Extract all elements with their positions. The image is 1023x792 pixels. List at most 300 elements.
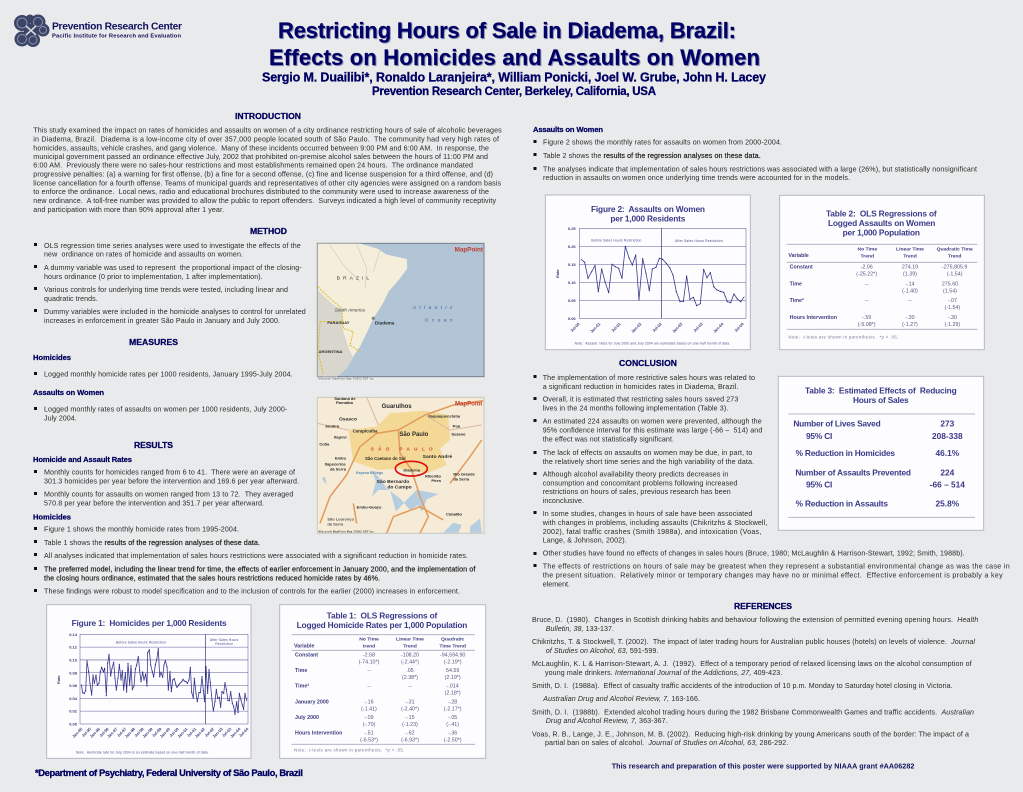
map labels: São Paulo bbox=[399, 432, 429, 438]
subheading: homicides results: Homicides bbox=[33, 512, 71, 522]
list: method bullets: OLS regression time series analyses were used to investigate the effects of the bbox=[44, 242, 301, 250]
table body: Quadratic Time bbox=[937, 246, 973, 252]
heading: measures: MEASURES bbox=[129, 337, 178, 347]
table body: -- bbox=[408, 684, 412, 690]
text block: references: McLaughlin, K. L & Harrison-Stewart, A. J. (1992). Effect of a temporary period of relaxed licensing laws on the alcohol consumption of bbox=[532, 660, 972, 668]
map labels: da Serra bbox=[327, 521, 344, 526]
panel: figure 2 chart: per 1,000 Residents bbox=[610, 214, 686, 224]
map labels: SÃO PAULO bbox=[371, 446, 437, 452]
table body: -- bbox=[865, 298, 869, 304]
line chart: assault rate: 0.00 bbox=[568, 316, 576, 321]
table body: -.51 bbox=[364, 731, 374, 737]
panel: table 2 bbox=[780, 195, 984, 350]
list: conclusion: 2002), fatal traffic crashes (Smith 1988a), and intoxication (Voas, bbox=[543, 528, 761, 536]
list: conclusion: element. bbox=[543, 581, 570, 589]
map labels: Osasco bbox=[339, 416, 357, 422]
list: assault results: The analyses indicate that implementation of sales hours restrictions was associated with a large (26%), but statistically nonsignificant bbox=[543, 165, 977, 173]
table body: (-1.54) bbox=[947, 271, 963, 277]
table body: (-1.54) bbox=[944, 305, 960, 311]
text block: introduction: This study examined the impact on rates of homicides and assaults on women of a city ordinance restricting hours of sale of alcoholic beverages bbox=[33, 127, 502, 135]
table body: Constant bbox=[790, 264, 813, 270]
chart title: Figure 2: Assaults on Women bbox=[591, 204, 705, 214]
line chart: homicide rate: Jan-98 bbox=[124, 726, 137, 739]
table body: -.59 bbox=[862, 315, 871, 321]
table body: -2.06 bbox=[861, 264, 873, 270]
table body: (-2.50*) bbox=[444, 738, 462, 744]
table body: 25.8% bbox=[936, 499, 960, 509]
line chart: assault rate: Jul-03 bbox=[692, 321, 704, 333]
line chart: homicide rate: Jul-02 bbox=[203, 726, 216, 738]
line chart: homicide rate: Jan-02 bbox=[194, 726, 207, 739]
list: assault results: Figure 2 shows the monthly rates for assaults on women from 2000-2004. bbox=[543, 139, 782, 147]
map labels: South America bbox=[335, 308, 365, 313]
authors: Sergio M. Duailibi*, Ronaldo Laranjeira*, William Ponicki, Joel W. Grube, John H. Lacey bbox=[262, 70, 766, 84]
list: assault results: Table 2 shows the results of the regression analyses on these data. bbox=[543, 152, 761, 160]
table body: Hours Intervention bbox=[790, 315, 837, 321]
table body: 224 bbox=[940, 468, 955, 478]
text block: references: of Studies on Alcohol, 63, 591-599. bbox=[546, 647, 658, 655]
map labels: Rio Grande bbox=[453, 472, 476, 477]
table body: -.31 bbox=[405, 699, 415, 705]
line chart: homicide rate: Jan-03 bbox=[211, 726, 224, 739]
list: conclusion: An estimated 224 assaults on women were prevented, although the bbox=[543, 418, 762, 426]
list: assault measure bbox=[34, 406, 288, 423]
line chart: assault rate bbox=[555, 226, 746, 334]
table body: -.15 bbox=[405, 715, 415, 721]
text block: introduction: to enforce the ordinance. Local news, radio and educational brochures distributed to the community were used to increase awareness of the bbox=[33, 188, 489, 196]
text block: references: Bruce, D. (1980). Changes in Scottish drinking habits and behaviour following the extension of permitted evening opening hours. Health bbox=[532, 616, 978, 624]
list: conclusion: The implementation of more restrictive sales hours was related to bbox=[543, 374, 755, 382]
table body bbox=[294, 637, 466, 744]
list: conclusion: Overall, it is estimated that restricting sales hours saved 273 bbox=[543, 396, 738, 404]
list: homicide measure: Logged monthly homicide rates per 1000 residents, January 1995-July 2004. bbox=[44, 371, 293, 379]
map labels: Suzano bbox=[451, 431, 466, 436]
list: conclusion: a significant reduction in homicides rates in Diadema, Brazil. bbox=[543, 383, 738, 391]
panel: table 1: Logged Homicide Rates per 1,000 Population bbox=[297, 620, 467, 630]
list: method bullets: new ordinance on rates of homicide and assaults on women. bbox=[44, 251, 243, 259]
panel: figure 1 chart bbox=[47, 605, 251, 758]
table body: (-1.29) bbox=[944, 322, 960, 328]
line chart: homicide rate: Jul-01 bbox=[186, 726, 198, 738]
list: conclusion: consumption and concomitant problems following increased bbox=[543, 479, 737, 487]
table body: (-2.44*) bbox=[401, 659, 419, 665]
table body: -275,805.9 bbox=[942, 264, 967, 270]
table body: (-5.08*) bbox=[858, 322, 876, 328]
table body: (-2.40*) bbox=[401, 706, 419, 712]
table body: -.14 bbox=[905, 281, 915, 287]
table body: .05 bbox=[406, 668, 414, 674]
title: Effects on Homicides and Assaults on Women bbox=[269, 45, 760, 70]
text block: references: Voas, R. B., Lange, J. E., Johnson, M. B. (2002). Reducing high-risk drinking by young Americans south of the border: The impact of a bbox=[532, 730, 969, 738]
list: conclusion: Other studies have found no effects of changes in sales hours (Bruce, 1980; McLaughlin & Harrison-Stewart, 1992; Smith, 1988b). bbox=[543, 550, 965, 558]
list: rates: Monthly counts for assaults on women ranged from 13 to 72. They averaged bbox=[44, 491, 293, 499]
text block: introduction: 6:00 AM. Previously there were no sales-hour restrictions and most establishments remained open 24 hours. The ordinance mandated bbox=[33, 162, 473, 170]
text block: introduction: in Diadema, Brazil. Diadema is a low-income city of over 357,000 people located south of São Paulo. The community had very high rates of bbox=[33, 135, 499, 143]
panel: figure 2 chart bbox=[545, 195, 750, 350]
line chart: assault rate: Jan-03 bbox=[671, 321, 684, 334]
table body: (-.41) bbox=[446, 722, 459, 728]
table body: (-74.10*) bbox=[359, 659, 380, 665]
table body: -108.20 bbox=[401, 652, 419, 658]
table body: (-2.17*) bbox=[444, 706, 462, 712]
list: method bullets: quadratic trends. bbox=[44, 295, 98, 303]
table body: -66 – 514 bbox=[930, 479, 965, 489]
map labels: BRAZIL bbox=[337, 275, 372, 281]
table body: July 2000 bbox=[295, 715, 319, 721]
map labels: do Campo bbox=[387, 485, 412, 491]
line chart: homicide rate: Jan-99 bbox=[141, 726, 154, 739]
table body: -.07 bbox=[948, 298, 957, 304]
list: rates: Monthly counts for homicides ranged from 6 to 41. There were an average of bbox=[44, 469, 295, 477]
list: conclusion bbox=[534, 374, 1010, 589]
map labels: São Lourenço bbox=[327, 517, 354, 522]
list: conclusion: the effect was not statistically significant. bbox=[543, 435, 674, 443]
line chart: homicide rate: Before Sales Hours Restriction bbox=[116, 640, 166, 644]
text block: references: Smith, D. I. (1988a). Effect of casualty traffic accidents of the introduction of 10 p.m. Monday to Saturday hotel closing in Victoria. bbox=[532, 682, 953, 690]
table body: % Reduction in Homicides bbox=[796, 448, 895, 458]
map labels: Embu-Guaçu bbox=[357, 505, 382, 510]
title: Restricting Hours of Sale in Diadema, Brazil: bbox=[278, 18, 736, 43]
line chart: homicide rate: 0.10 bbox=[69, 658, 78, 663]
table body: Hours Intervention bbox=[295, 731, 342, 737]
line chart: homicide rate: 0.04 bbox=[69, 696, 78, 701]
map labels: Itapevi bbox=[334, 435, 347, 440]
line chart: assault rate: 0.05 bbox=[568, 298, 576, 303]
table body: Quadratic bbox=[441, 637, 465, 643]
list: homicide results: All analyses indicated that implementation of sales hours restrictions were associated with a significant reduction in homicide rates. bbox=[44, 552, 468, 560]
chart note: Note: Assault rates for July 2000 and July 2004 are estimates based on one-half month of data. bbox=[575, 342, 730, 346]
map labels: da Serra bbox=[453, 477, 470, 482]
map labels: PARAGUAY bbox=[327, 320, 350, 325]
table body: January 2000 bbox=[295, 699, 329, 705]
list: assault results bbox=[534, 139, 977, 182]
table body: 95% CI bbox=[806, 431, 832, 441]
table body: (-1.27) bbox=[902, 322, 918, 328]
table body: -- bbox=[367, 684, 371, 690]
list: conclusion: Although alcohol availability theory predicts decreases in bbox=[543, 470, 728, 478]
list: conclusion: restrictions on hours of sales, previous research has been bbox=[543, 488, 731, 496]
text block: introduction bbox=[33, 127, 502, 214]
text block: introduction: and participation with more than 90% approval after 1 year. bbox=[33, 206, 224, 214]
table body: (-2.19*) bbox=[444, 659, 462, 665]
list: method bullets bbox=[34, 242, 306, 325]
line chart: homicide rate: Jul-00 bbox=[168, 726, 180, 738]
map labels: Microsoft MapPoint Map ©2002 GDT Inc bbox=[319, 530, 374, 533]
table body: (2.38*) bbox=[402, 675, 418, 681]
table body: -.30 bbox=[905, 315, 915, 321]
list: conclusion: with changes in problems, including assaults (Chikritzhs & Stockwell, bbox=[542, 519, 767, 527]
list: conclusion: lives in the 24 months following implementation (Table 3). bbox=[543, 405, 728, 413]
table body: Trend bbox=[861, 253, 874, 259]
map labels: Santana de bbox=[334, 396, 356, 401]
map labels: Ribeirão bbox=[425, 473, 442, 478]
line chart: homicide rate: Jan-04 bbox=[229, 726, 242, 739]
table body: Linear Time bbox=[896, 246, 924, 252]
panel: table 2: Logged Assaults on Women bbox=[828, 218, 935, 228]
table body bbox=[793, 419, 965, 509]
text block: references: Smith, D. I. (1988b). Extended alcohol trading hours during the 1982 Brisbane Commonwealth Games and traffic accidents. Australian bbox=[532, 708, 974, 716]
text block: references: Bulletin, 38, 133-137. bbox=[546, 625, 614, 633]
line chart: homicide rate: After Sales Hours bbox=[210, 638, 239, 642]
map labels: Embu bbox=[335, 455, 347, 460]
line chart: homicide rate: Jan-97 bbox=[106, 726, 119, 739]
line chart: assault rate: Rate bbox=[555, 269, 560, 278]
list: method bullets: increases in enforcement in greater São Paulo in January and July 2000. bbox=[44, 317, 280, 325]
line chart: assault rate: 0.15 bbox=[568, 262, 576, 267]
text block: references: partial ban on sales of alcohol. Journal of Studies on Alcohol, 63, 286-292. bbox=[545, 739, 788, 747]
list: assault results: reduction in assaults on women once underlying time trends were accounted for in the models. bbox=[543, 174, 850, 182]
chart note: Note: Homicide rate for July 2004 is an estimate based on one-half month of data. bbox=[76, 750, 209, 754]
map labels: Jandira bbox=[325, 424, 340, 429]
line chart: assault rate: After Sales Hours Restriction bbox=[675, 239, 723, 243]
map labels: São Caetano do Sul bbox=[365, 456, 406, 461]
map labels: MapPoint bbox=[455, 401, 482, 407]
map labels: da Serra bbox=[330, 466, 347, 471]
organisation name: Prevention Research Center bbox=[52, 22, 182, 32]
table body: -2.58 bbox=[363, 652, 375, 658]
table note: Note: t-tests are shown in parenthesis. *p < .05. bbox=[788, 334, 898, 339]
line chart: homicide rate: 0.14 bbox=[69, 632, 78, 637]
table title: Table 1: OLS Regressions of bbox=[327, 611, 438, 621]
subheading: homicide and assault rates: Homicide and Assault Rates bbox=[33, 455, 132, 464]
line chart: homicide rate: Jul-95 bbox=[80, 726, 93, 738]
table body: (2.19*) bbox=[445, 675, 461, 681]
table body: 274.19 bbox=[902, 264, 918, 270]
list: method bullets: Various controls for underlying time trends were tested, including linear and bbox=[44, 286, 288, 294]
table body: -.05 bbox=[448, 715, 457, 721]
line chart: assault rate: Before Sales Hours Restriction bbox=[591, 239, 641, 243]
table body: -.16 bbox=[364, 699, 374, 705]
line chart: homicide rate: Jul-97 bbox=[116, 726, 128, 738]
map labels: Cubatão bbox=[446, 511, 463, 516]
table body: Trend bbox=[948, 253, 961, 259]
table body: trend bbox=[363, 644, 375, 650]
list: rates bbox=[34, 469, 299, 508]
line chart: homicide rate: 0.08 bbox=[69, 670, 78, 675]
list: conclusion: The effects of restrictions on hours of sale may be greatest when they represent a substantial environmental change as was the case in bbox=[543, 562, 1010, 570]
list: conclusion: Lange, & Johnson, 2002). bbox=[543, 537, 627, 545]
list: method bullets: Dummy variables were included in the homicide analyses to control for unrelated bbox=[44, 308, 306, 316]
table note: Note: t-tests are shown in parenthesis. *p < .05. bbox=[294, 748, 404, 753]
list: homicide results: the closing hours ordinance, estimated that the sales hours restrictions reduced homicide rates by 46%. bbox=[44, 574, 380, 582]
text block: introduction: progressive penalties: (a) a warning for first offense, (b) a fine for a second offense, (c) fine and license suspension for a third offense, and (d) bbox=[33, 170, 493, 178]
line chart: assault rate: Jul-00 bbox=[569, 321, 581, 333]
map labels: Carapicuiba bbox=[353, 428, 378, 433]
text block: introduction: homicides, assaults, vehicle crashes, and gang violence. Many of these incidents occurred between 9:00 PM and 6:00 AM. In response, the bbox=[33, 144, 489, 152]
line chart: homicide rate: Jul-04 bbox=[238, 726, 250, 738]
table body: Time² bbox=[295, 684, 309, 690]
table body: Trend bbox=[903, 253, 917, 259]
table body: (-6.93*) bbox=[401, 738, 419, 744]
map labels: Santo André bbox=[423, 454, 452, 460]
list: homicide results: The preferred model, including the linear trend for time, the effects of earlier enforcement in January 2000, and the implementation of bbox=[44, 565, 475, 573]
table body: -.09 bbox=[364, 715, 374, 721]
table body: -.28 bbox=[448, 699, 457, 705]
table body: 54.59 bbox=[446, 668, 459, 674]
line chart: homicide rate: Jul-03 bbox=[221, 726, 233, 738]
list: homicide results: Table 1 shows the results of the regression analyses of these data. bbox=[44, 539, 260, 547]
table body: Linear Time bbox=[396, 637, 424, 643]
line chart: assault rate: Jan-02 bbox=[630, 321, 643, 334]
table body: Constant bbox=[295, 652, 318, 658]
list: rates: 570.8 per year before the intervention and 351.7 per year afterward. bbox=[44, 500, 264, 508]
table body: 275.60 bbox=[942, 281, 958, 287]
table body: 208-338 bbox=[932, 431, 963, 441]
text block: references: Australian Drug and Alcohol Review, 7, 163-166. bbox=[542, 695, 700, 703]
funding note: This research and preparation of this poster were supported by NIAAA grant #AA06282 bbox=[612, 761, 914, 770]
list: conclusion: The lack of effects on assaults on women may be due, in part, to bbox=[543, 449, 752, 457]
line chart: homicide rate: 0.02 bbox=[69, 709, 78, 714]
line chart: homicide rate: Jan-95 bbox=[71, 726, 84, 739]
table body: 95% CI bbox=[806, 479, 832, 489]
list: rates: 301.3 homicides per year before the intervention and 169.6 per year afterward. bbox=[44, 477, 299, 485]
line chart: homicide rate: Restriction bbox=[215, 642, 233, 646]
map labels: Guarulhos bbox=[382, 404, 412, 410]
map labels: Ocean bbox=[425, 318, 456, 324]
table body bbox=[788, 246, 973, 328]
map: Brazil bbox=[317, 243, 484, 380]
line chart: homicide rate: Jul-96 bbox=[98, 726, 110, 738]
table body: (1.54) bbox=[943, 288, 957, 294]
chart title: Figure 1: Homicides per 1,000 Residents bbox=[72, 618, 227, 628]
map labels: ARGENTINA bbox=[319, 349, 342, 354]
table body: (-25.22*) bbox=[856, 271, 877, 277]
map labels: Microsoft MapPoint Map ©2002 GDT Inc bbox=[319, 377, 374, 380]
list: homicide results: These findings were robust to model specification and to the inclusion of controls for the earlier (2000) increases in enforcement. bbox=[44, 587, 460, 595]
title bbox=[262, 18, 766, 98]
map labels: Poá bbox=[453, 424, 461, 429]
line chart: assault rate: Jan-04 bbox=[712, 321, 725, 334]
table body: (1.39) bbox=[903, 271, 917, 277]
subheading: assaults on women: Assaults on Women bbox=[33, 388, 104, 397]
footnote: department: *Department of Psychiatry, Federal University of São Paulo, Brazil bbox=[35, 767, 303, 778]
map labels: Itaquaquecetuba bbox=[428, 413, 461, 418]
line chart: homicide rate bbox=[56, 632, 250, 739]
heading: introduction: INTRODUCTION bbox=[235, 111, 301, 121]
table body: 46.1% bbox=[936, 448, 960, 458]
text block: introduction: new ordinance. A toll-free number was provided to allow the public to report offenders. Surveys indicated a high level of community receptivity bbox=[33, 197, 496, 205]
table body: Time² bbox=[790, 298, 804, 304]
line chart: homicide rate: Jan-96 bbox=[89, 726, 102, 739]
text block: introduction: municipal government passed an ordinance effective July, 2002 that prohibited on-premise alcohol sales between the hours of 11:00 PM and bbox=[33, 153, 488, 161]
logo: Prevention Research Center bbox=[14, 14, 182, 47]
icon: knot bbox=[14, 14, 50, 47]
map labels: Itapecerica bbox=[325, 461, 346, 466]
line chart: homicide rate: 0.12 bbox=[69, 645, 78, 650]
list: conclusion: 95% confidence interval for this estimate was large (-66 – 514) and bbox=[543, 427, 762, 435]
highlight: Diadema bbox=[395, 461, 427, 476]
line chart: assault rate: Jul-02 bbox=[651, 321, 663, 333]
heading: conclusion: CONCLUSION bbox=[619, 358, 677, 368]
line chart: homicide rate: 0.00 bbox=[69, 722, 78, 727]
subheading: assaults on women right column: Assaults on Women bbox=[533, 125, 603, 134]
line chart: assault rate: Jan-01 bbox=[589, 321, 602, 334]
table body: -- bbox=[908, 298, 912, 304]
line chart: homicide rate: 0.06 bbox=[69, 683, 78, 688]
line chart: assault rate: 0.20 bbox=[568, 244, 576, 249]
list: conclusion: inconclusive. bbox=[543, 497, 584, 505]
list: method bullets: A dummy variable was used to represent the proportional impact of the closing- bbox=[44, 264, 302, 272]
table body: (-1.23) bbox=[402, 722, 418, 728]
table body: No Time bbox=[858, 246, 877, 252]
map labels: MapPoint bbox=[455, 247, 484, 254]
table body: (-6.53*) bbox=[360, 738, 378, 744]
line chart: assault rate: 0.25 bbox=[568, 226, 576, 231]
list: conclusion: the present situation. Relatively minor or temporary changes may have no or minimal effect. Effective enforcement is probably a key bbox=[543, 571, 1003, 579]
table body: -.014 bbox=[447, 684, 459, 690]
map labels bbox=[319, 247, 484, 380]
heading: references: REFERENCES bbox=[734, 601, 792, 611]
panel: table 3 bbox=[778, 376, 984, 530]
list: conclusion: In some studies, changes in hours of sale have been associated bbox=[543, 510, 752, 518]
line chart: homicide rate: Jan-01 bbox=[176, 726, 189, 739]
map labels: Pires bbox=[431, 478, 442, 483]
table body: -- bbox=[865, 281, 869, 287]
table body: Time bbox=[790, 281, 802, 287]
affiliation: Prevention Research Center, Berkeley, California, USA bbox=[372, 86, 656, 98]
map labels bbox=[319, 396, 482, 533]
subheading: homicides: Homicides bbox=[33, 353, 71, 362]
table body: -.36 bbox=[448, 731, 457, 737]
map: São Paulo region bbox=[317, 396, 484, 533]
table body: -94,594.90 bbox=[440, 652, 465, 658]
line chart: homicide rate: Jul-99 bbox=[151, 726, 163, 738]
table body: Variable bbox=[788, 253, 809, 259]
table body: Number of Assaults Prevented bbox=[795, 468, 911, 478]
heading: method: METHOD bbox=[250, 226, 287, 236]
map labels: São Bernardo bbox=[377, 479, 409, 485]
map labels: Parnaiba bbox=[336, 400, 354, 405]
line chart: homicide rate: Rate bbox=[56, 675, 61, 684]
table body: Trend bbox=[403, 644, 417, 650]
text block: introduction: license cancellation for a fourth offense. Teams of municipal guards and representatives of other city agencies were assigned on a random basis bbox=[33, 179, 501, 187]
table body: 273 bbox=[940, 419, 955, 429]
list: conclusion: the relatively short time series and the high variability of the data. bbox=[543, 458, 754, 466]
table body: (-1.40) bbox=[902, 288, 918, 294]
panel: table 2: per 1,000 Population bbox=[843, 227, 920, 237]
table body: (2.18*) bbox=[445, 691, 461, 697]
panel: table 3: Hours of Sales bbox=[853, 395, 909, 405]
line chart: assault rate: Jul-04 bbox=[733, 321, 745, 333]
list: assault measure: July 2004. bbox=[44, 415, 77, 423]
table title: Table 2: OLS Regressions of bbox=[826, 208, 937, 218]
table body: (-1.41) bbox=[361, 706, 377, 712]
line chart: homicide rate: Jul-98 bbox=[133, 726, 145, 738]
table body: -.30 bbox=[948, 315, 957, 321]
table body: -.62 bbox=[405, 731, 415, 737]
map labels: Cotia bbox=[319, 441, 330, 446]
table body: Time Trend bbox=[439, 644, 466, 650]
table body: No Time bbox=[359, 637, 379, 643]
map labels: Diadema bbox=[375, 321, 395, 326]
text block: references: Drug and Alcohol Review, 7, 363-367. bbox=[546, 717, 668, 725]
table body: Variable bbox=[294, 644, 314, 650]
organisation subtitle: Pacific Institute for Research and Evaluation bbox=[52, 34, 181, 40]
table body: Time bbox=[295, 668, 307, 674]
heading: results: RESULTS bbox=[134, 440, 173, 450]
text block: references: young male drinkers. International Journal of the Addictions, 27, 409-423. bbox=[545, 669, 782, 677]
list: method bullets: hours ordinance (0 prior to implementation, 1 after implementation). bbox=[44, 273, 263, 281]
table body: -- bbox=[367, 668, 371, 674]
line chart: assault rate: Jul-01 bbox=[610, 321, 622, 333]
list: homicide results bbox=[34, 526, 475, 595]
panel: table 1 bbox=[280, 605, 486, 758]
table body: Number of Lives Saved bbox=[793, 419, 881, 429]
list: assault measure: Logged monthly rates of assaults on women per 1000 residents, July 2000- bbox=[44, 406, 288, 414]
table title: Table 3: Estimated Effects of Reducing bbox=[805, 385, 957, 395]
map labels: Repesa Billings bbox=[356, 471, 383, 475]
text block: references bbox=[532, 616, 978, 747]
